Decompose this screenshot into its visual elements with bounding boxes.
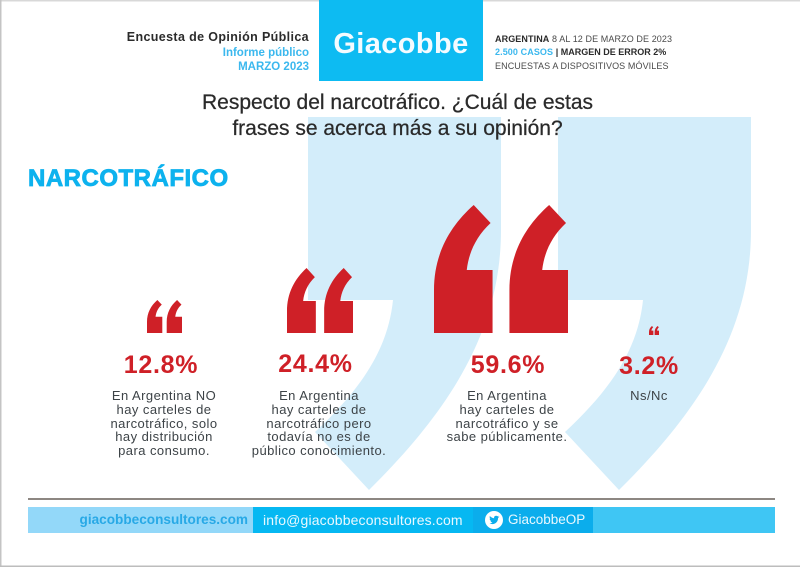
description: 12.8%: hay distribución	[115, 429, 213, 444]
description: 12.8%: hay carteles de	[117, 402, 211, 417]
footer: twitter	[473, 507, 593, 533]
description: 24.4%	[252, 388, 386, 458]
header left: survey title: Encuesta de Opinión Pública	[127, 30, 309, 44]
result: 3.2%: 3.2%	[619, 352, 679, 380]
description: 59.6%: narcotráfico y se	[455, 416, 559, 431]
footer: email: info@giacobbeconsultores.com	[263, 512, 463, 528]
description: 24.4%: hay carteles de	[272, 402, 366, 417]
icon: red quote 59.6%	[434, 205, 568, 333]
description: Ns/Nc: Ns/Nc	[630, 388, 668, 403]
icon: twitter bird	[485, 511, 503, 529]
description: 24.4%: narcotráfico pero	[266, 416, 372, 431]
question heading: frases se acerca más a su opinión?	[232, 117, 563, 140]
description: 24.4%: público conocimiento.	[252, 443, 386, 458]
description: 59.6%: sabe públicamente.	[447, 429, 567, 444]
result: 59.6%: 59.6%	[471, 351, 545, 379]
icon: red quote 24.4%	[287, 268, 353, 333]
footer: twitter: GiacobbeOP	[508, 512, 585, 527]
header right: survey details: ENCUESTAS A DISPOSITIVOS MÓVILES	[495, 60, 669, 70]
footer divider	[28, 498, 775, 500]
header logo: Giacobbe	[319, 0, 483, 81]
icon: red quote 12.8%	[147, 300, 182, 333]
result: 12.8%: 12.8%	[124, 351, 198, 379]
footer: email	[253, 507, 473, 533]
description: 12.8%: En Argentina NO	[112, 388, 216, 403]
header left: survey title: MARZO 2023	[238, 61, 309, 73]
header logo: Giacobbe: Giacobbe	[333, 28, 469, 60]
header right: survey details: ARGENTINA 8 AL 12 DE MARZO DE 2023	[495, 34, 672, 44]
question heading: Respecto del narcotráfico. ¿Cuál de estas	[202, 91, 593, 114]
header right: survey details	[495, 34, 672, 70]
description: 12.8%	[110, 388, 218, 458]
description: 24.4%: todavía no es de	[267, 429, 371, 444]
description: 12.8%: narcotráfico, solo	[110, 416, 218, 431]
description: 12.8%: para consumo.	[118, 443, 210, 458]
header left: survey title	[127, 30, 309, 73]
footer bar	[28, 507, 775, 533]
icon: red quote 3.2%	[649, 326, 659, 335]
result: 24.4%: 24.4%	[278, 350, 353, 378]
header right: survey details: 2.500 CASOS | MARGEN DE ERROR 2%	[495, 47, 666, 57]
description: 59.6%: En Argentina	[467, 388, 547, 403]
footer: website: giacobbeconsultores.com	[80, 512, 248, 527]
description: 59.6%: hay carteles de	[460, 402, 554, 417]
footer: website	[28, 507, 253, 533]
description: 59.6%	[447, 388, 567, 444]
section title: NARCOTRÁFICO: NARCOTRÁFICO	[28, 165, 229, 192]
header left: survey title: Informe público	[223, 46, 309, 58]
question heading	[202, 91, 593, 140]
description: 24.4%: En Argentina	[279, 388, 359, 403]
